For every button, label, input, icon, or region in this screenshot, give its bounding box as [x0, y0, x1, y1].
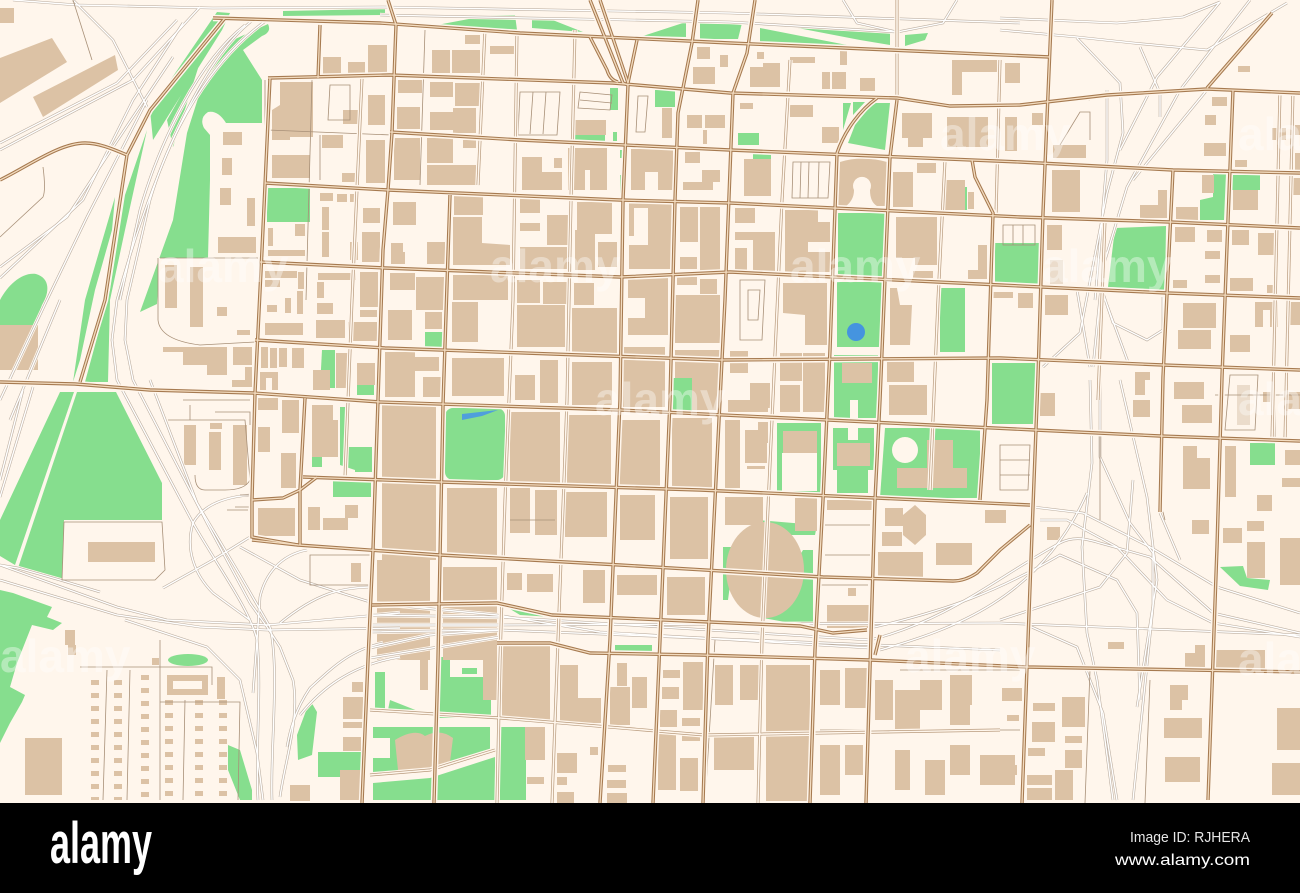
faint watermarks: alamy	[940, 108, 1071, 160]
park: riverside strip	[140, 24, 269, 312]
faint watermarks: alamy	[595, 373, 726, 425]
pond in central park	[847, 323, 865, 341]
park: large lower-left	[0, 392, 162, 581]
water features	[462, 323, 865, 420]
faint watermarks: alamy	[158, 240, 289, 292]
pond in lower field	[462, 410, 498, 420]
small houses lower-left	[95, 675, 223, 800]
white interior areas in parks	[64, 258, 918, 758]
faint watermarks	[0, 108, 1300, 685]
park: left edge green	[0, 590, 62, 743]
faint watermarks: alamy	[790, 240, 921, 292]
alamy logo: alamy	[50, 811, 152, 876]
secondary streets	[345, 0, 1293, 803]
image id and website credit: www.alamy.com	[1114, 852, 1250, 869]
small parks	[168, 9, 1275, 800]
image id and website credit: Image ID: RJHERA	[1130, 829, 1250, 846]
image id and website credit	[1114, 829, 1250, 869]
faint watermarks: alamy	[490, 240, 621, 292]
faint watermarks: alamy	[1042, 240, 1173, 292]
bottom black bar	[0, 803, 1300, 893]
park: left blob	[0, 274, 47, 327]
park: narrow strips	[73, 12, 230, 382]
faint watermarks: alamy	[0, 630, 131, 682]
faint watermarks: alamy	[905, 630, 1036, 682]
